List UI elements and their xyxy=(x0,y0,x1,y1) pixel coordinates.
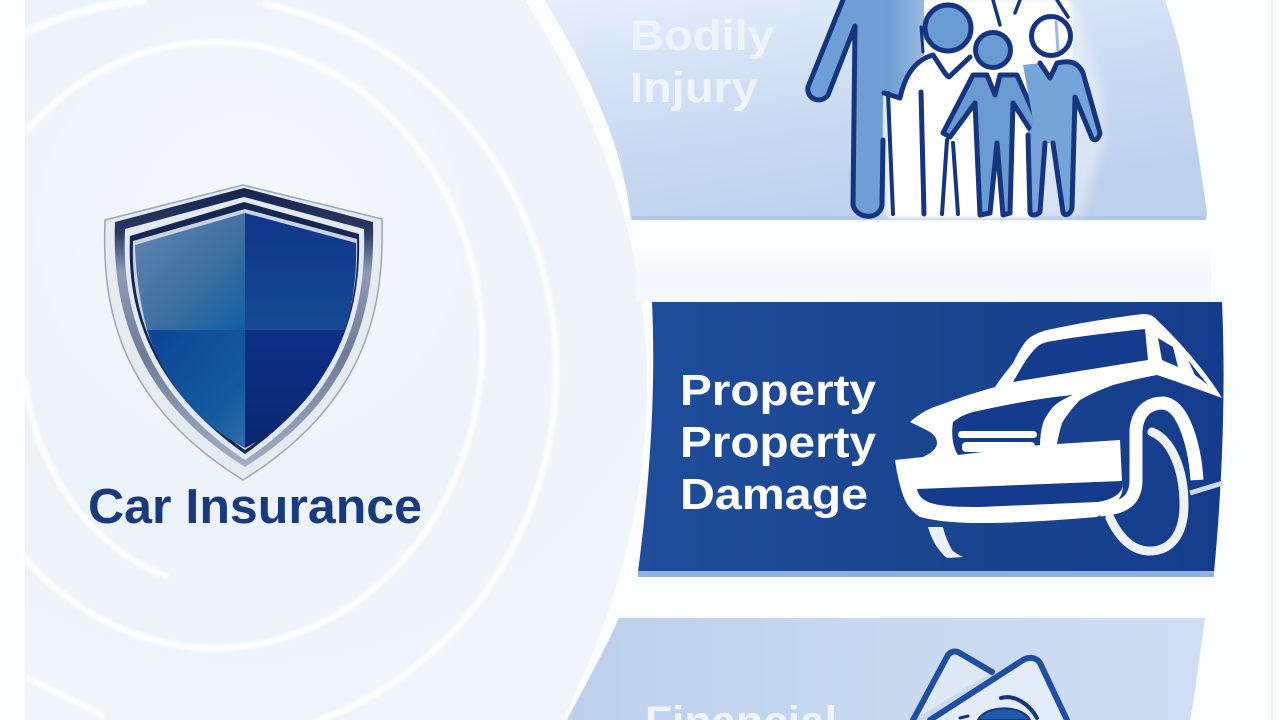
heading: Bodily Injury: Bodily xyxy=(630,12,774,60)
right figure xyxy=(1023,16,1100,215)
title: Car Insurance: Car Insurance xyxy=(88,480,422,534)
shield icon xyxy=(105,185,382,480)
icon: family xyxy=(808,0,1105,218)
car body xyxy=(895,314,1222,523)
mud flap xyxy=(928,527,963,558)
heading: Property Property Damage: Damage xyxy=(680,470,868,519)
panel: financial xyxy=(567,618,1205,720)
wheel arch band xyxy=(1100,403,1197,510)
icon: banknotes xyxy=(913,651,1067,720)
icon: car xyxy=(895,314,1223,558)
bumper slot xyxy=(917,481,1123,507)
top fragments xyxy=(993,0,1068,25)
gap shading xyxy=(636,248,1211,302)
shield quadrants xyxy=(135,213,356,448)
heading: Property Property Damage xyxy=(680,366,877,519)
concentric decorative rings xyxy=(0,0,556,720)
headlight and grille xyxy=(952,395,1073,455)
heading: Bodily Injury xyxy=(630,12,774,112)
heading: Bodily Injury: Injury xyxy=(630,64,758,112)
panel: property damage xyxy=(638,302,1224,577)
tall figure xyxy=(808,0,924,216)
child figure xyxy=(942,32,1042,215)
circle boundary xyxy=(528,0,650,720)
tyre xyxy=(1110,432,1184,551)
heading: Property Property Damage: Property xyxy=(680,366,877,415)
left panel: central circle area xyxy=(0,0,650,720)
parent figure xyxy=(884,5,971,214)
panel: bodily injury xyxy=(545,0,1207,220)
heading: Property Property Damage: Property xyxy=(680,418,877,467)
side windows xyxy=(1158,338,1178,367)
road line xyxy=(1190,483,1223,493)
windshield xyxy=(1013,329,1148,382)
